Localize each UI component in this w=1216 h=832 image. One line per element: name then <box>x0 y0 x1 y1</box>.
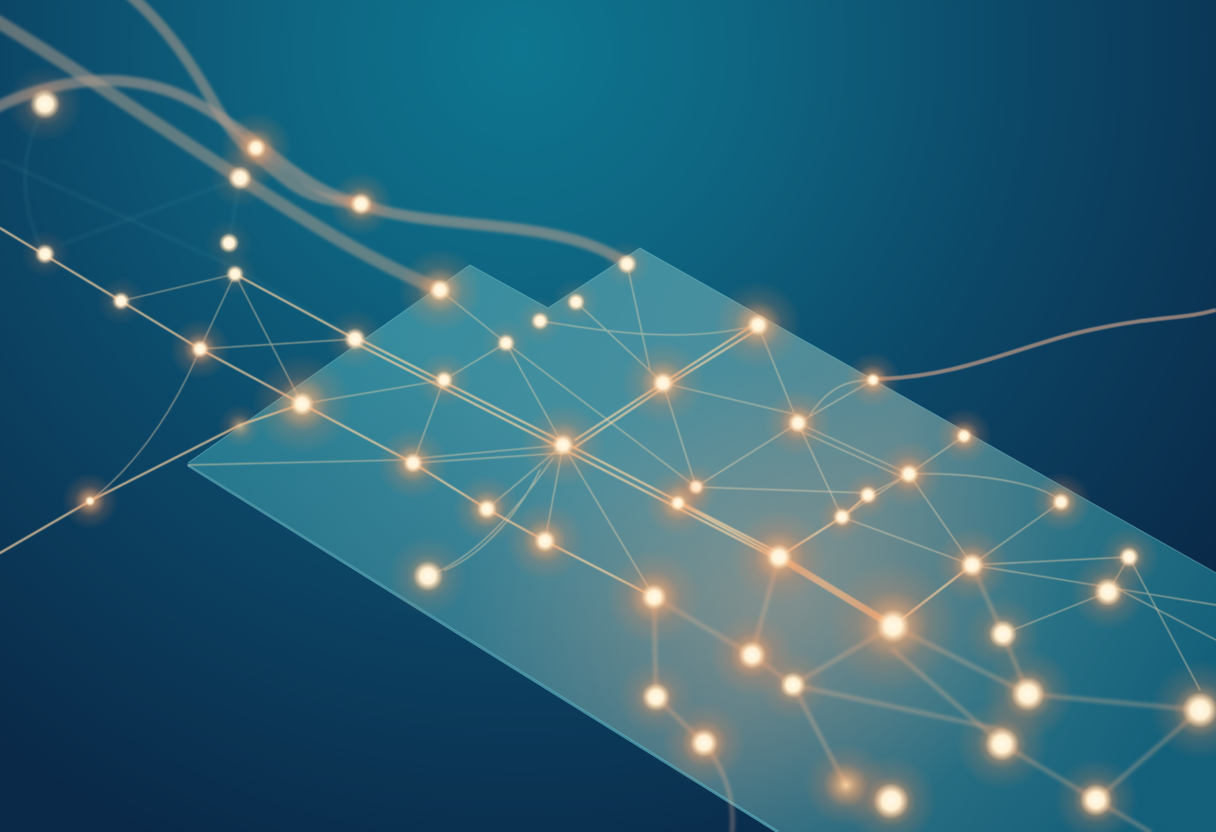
faint background network lines <box>0 120 355 339</box>
soft lower right links <box>654 557 1200 832</box>
main orange-lit links <box>0 228 972 626</box>
thin connections <box>90 264 1216 690</box>
nodes: on the panel <box>252 248 1216 832</box>
wide lit ribbon to brightest node <box>779 557 893 626</box>
glass panel <box>188 248 1216 832</box>
ribbon strand right <box>873 310 1216 379</box>
nodes: outside the panel <box>7 66 651 529</box>
ribbon strands upper left <box>0 0 627 290</box>
